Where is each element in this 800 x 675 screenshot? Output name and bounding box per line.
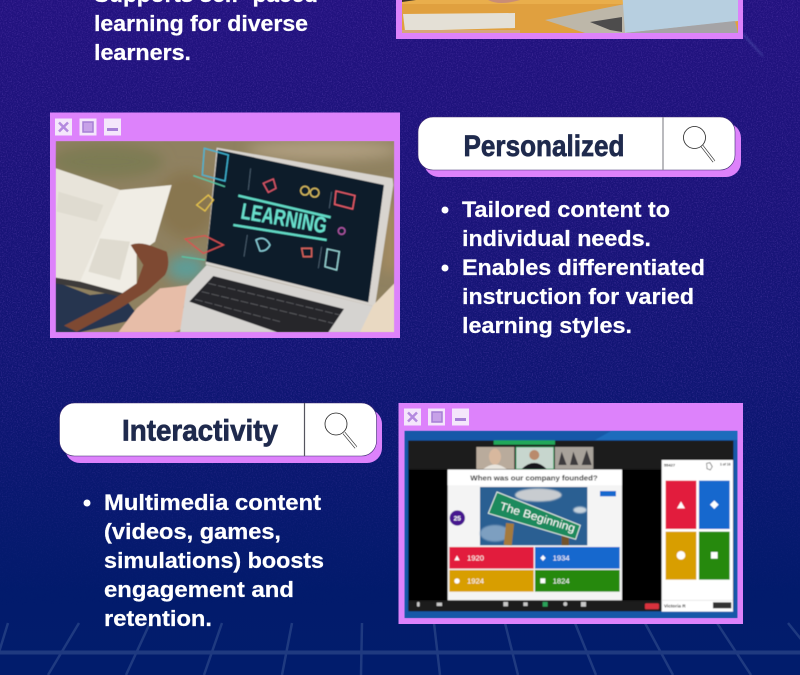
text block: personalized bullets — [442, 197, 705, 338]
screenshot: video call quiz: 1824 — [553, 577, 570, 586]
screenshot: video call quiz — [404, 431, 738, 618]
zoom toolbar icons — [417, 602, 586, 607]
text block: interactivity bullet — [84, 490, 324, 631]
icon: magnifier — [325, 413, 356, 448]
panel: learning laptop window — [50, 112, 400, 338]
photo: laptop showing learning: LEARNING — [239, 198, 329, 238]
window controls — [55, 118, 121, 136]
screenshot: video call quiz: 25 — [454, 515, 461, 522]
heading: Interactivity: Interactivity — [122, 414, 278, 448]
video tiles — [476, 447, 514, 469]
floor grid — [0, 623, 800, 675]
icon: magnifier — [684, 126, 714, 162]
screenshot: video call quiz: 55427 — [664, 462, 676, 467]
text block: interactivity bullet: retention. — [104, 606, 212, 631]
text block: interactivity bullet: engagement and — [104, 577, 294, 602]
text block: self-paced learning — [94, 0, 318, 65]
text block: personalized bullets: Tailored content to — [462, 197, 670, 222]
answer tiles — [449, 547, 534, 569]
text block: personalized bullets: instruction for varied — [462, 284, 694, 309]
panel: quiz window — [398, 403, 743, 624]
panel: top photo window — [396, 0, 743, 39]
screenshot: video call quiz: When was our company founded? — [470, 475, 598, 482]
photo: laptop showing learning — [50, 140, 400, 332]
open book — [56, 168, 172, 293]
search bar: Interactivity — [60, 403, 382, 463]
photo: desk with laptop — [402, 0, 738, 33]
hands — [64, 243, 168, 332]
text block: interactivity bullet: simulations) boosts — [104, 548, 324, 573]
window controls — [404, 408, 469, 426]
text block: personalized bullets: individual needs. — [462, 226, 651, 251]
text block: self-paced learning: learners. — [94, 40, 191, 65]
screenshot: video call quiz: The Beginning — [498, 501, 577, 535]
light glint — [743, 34, 763, 56]
quiz slide — [448, 470, 622, 600]
laptop deck — [180, 265, 394, 332]
screenshot: video call quiz: 1 of 10 — [720, 463, 731, 467]
screenshot: video call quiz: 1934 — [553, 554, 570, 563]
neon screen icons — [182, 148, 355, 270]
text block: personalized bullets: Enables differentiated — [462, 255, 705, 280]
text block: interactivity bullet: (videos, games, — [104, 519, 281, 544]
heading: Personalized: Personalized — [464, 130, 624, 163]
text block: interactivity bullet: Multimedia content — [104, 490, 322, 515]
screenshot: video call quiz: 1924 — [467, 577, 485, 586]
screenshot: video call quiz: Victoria R — [664, 604, 686, 609]
text block: self-paced learning: learning for diverse — [94, 11, 308, 36]
phone panel — [662, 460, 733, 612]
screenshot: video call quiz: 1920 — [467, 554, 484, 563]
laptop lid — [206, 148, 393, 307]
search bar: Personalized — [418, 117, 741, 177]
teal bars and word — [238, 196, 331, 217]
text block: personalized bullets: learning styles. — [462, 313, 632, 338]
